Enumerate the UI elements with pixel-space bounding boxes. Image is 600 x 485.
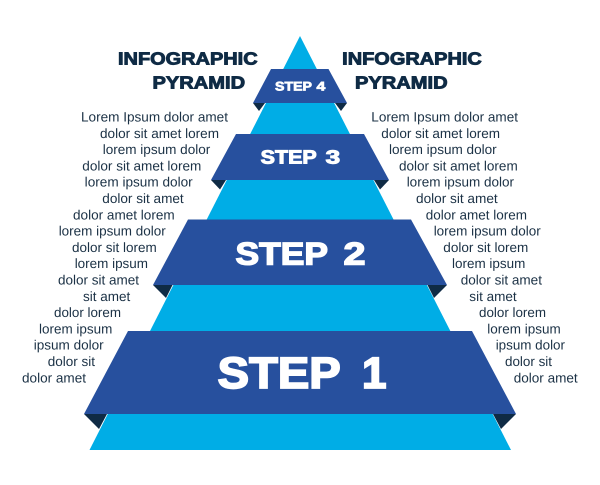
left text block: dolor sit lorem [72, 240, 157, 255]
right text block: lorem ipsum [487, 321, 561, 336]
left text block: ipsum dolor [34, 338, 104, 353]
left text block: dolor sit amet lorem [82, 158, 201, 173]
left text block: dolor sit amet [102, 191, 184, 206]
right text block: ipsum dolor [496, 338, 565, 353]
left text block [22, 110, 228, 385]
right text block: dolor sit amet lorem [399, 158, 518, 173]
right text block: dolor sit lorem [443, 240, 528, 255]
right text block: dolor sit [505, 354, 552, 369]
right text block: lorem ipsum dolor [434, 224, 541, 239]
right text block: dolor amet [514, 370, 578, 385]
step 4 band [253, 69, 347, 111]
right text block: dolor sit amet [416, 191, 498, 206]
step 3 band [211, 134, 389, 190]
right text block: lorem ipsum [452, 256, 525, 271]
left text block: lorem ipsum dolor [59, 224, 166, 239]
right text block: Lorem Ipsum dolor amet [371, 110, 518, 124]
step 1 band: STEP [218, 349, 341, 398]
right text block: dolor sit amet [461, 272, 542, 288]
right text block: dolor lorem [479, 305, 546, 320]
pyramid background [90, 36, 511, 450]
right text block: dolor amet lorem [426, 207, 527, 222]
step 2 band: STEP [236, 235, 328, 271]
right heading: INFOGRAPHIC [342, 49, 482, 69]
step 1 band: 1 [362, 349, 386, 398]
step 1 band [84, 331, 516, 429]
left text block: lorem ipsum dolor [85, 175, 193, 190]
left text block: dolor amet [22, 370, 86, 385]
left text block: lorem ipsum [39, 321, 112, 336]
left heading: PYRAMID [152, 72, 245, 92]
left heading: INFOGRAPHIC [118, 49, 258, 69]
right text block [371, 110, 578, 385]
right heading [342, 49, 482, 92]
left text block: dolor lorem [54, 305, 121, 320]
step 2 band: 2 [344, 235, 366, 271]
step 2 band [153, 220, 447, 298]
left heading [118, 49, 258, 92]
left text block: lorem ipsum [75, 256, 148, 271]
right text block: dolor sit amet lorem [381, 126, 500, 141]
left text block: dolor amet lorem [73, 207, 175, 222]
left text block: Lorem Ipsum dolor amet [81, 110, 228, 124]
right text block: sit amet [469, 289, 517, 304]
right text block: lorem ipsum dolor [389, 142, 497, 157]
right heading: PYRAMID [355, 72, 448, 92]
right text block: lorem ipsum dolor [407, 175, 514, 190]
left text block: lorem ipsum dolor [103, 142, 211, 157]
step 4 band: 4 [316, 80, 325, 94]
step 3 band: STEP [261, 148, 317, 168]
left text block: dolor sit [48, 354, 95, 369]
step 3 band: 3 [326, 148, 340, 168]
left text block: dolor sit amet [58, 272, 139, 288]
left text block: dolor sit amet lorem [100, 126, 219, 141]
left text block: sit amet [83, 289, 131, 304]
step 4 band: STEP [275, 80, 312, 94]
